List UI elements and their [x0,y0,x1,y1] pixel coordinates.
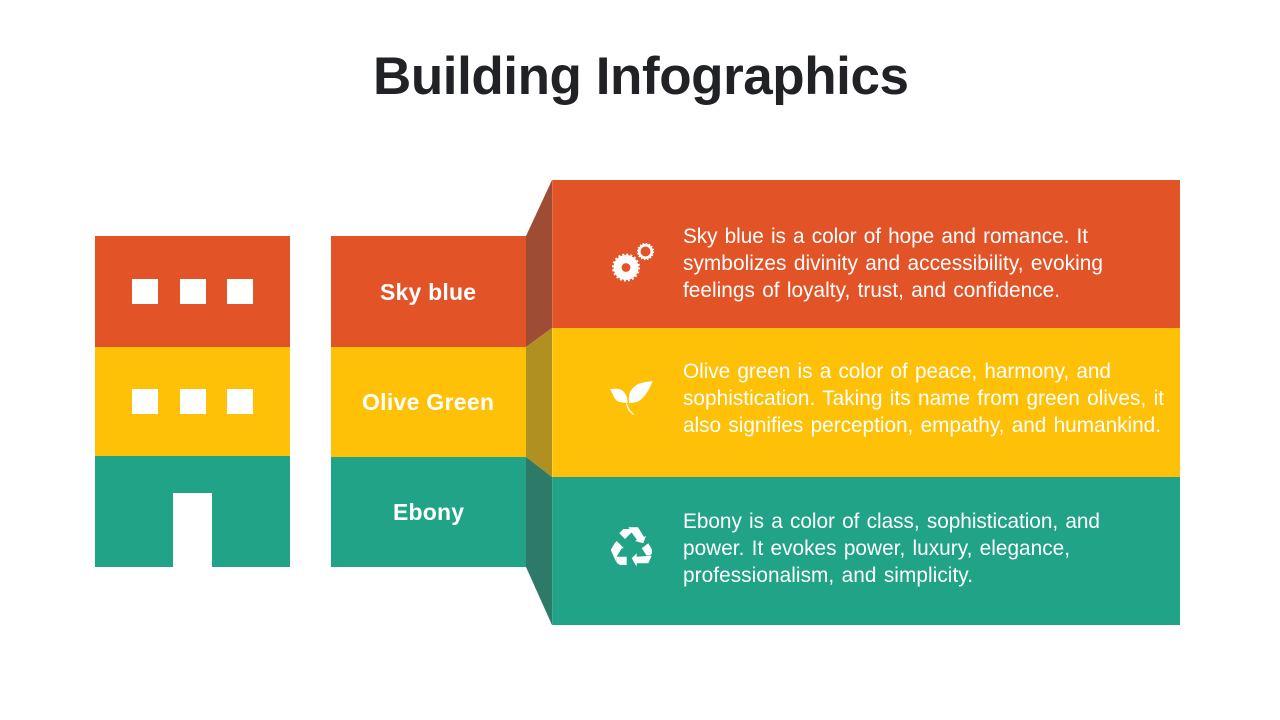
description text [683,360,1164,437]
label: Ebony: Ebony [393,499,464,525]
building top floor [95,236,290,347]
label: Olive Green: Olive Green [362,389,494,415]
icon: recycle [611,527,652,567]
panel: Sky blue [552,180,1180,328]
description text [683,225,1103,302]
description text: power. It evokes power, luxury, elegance, [683,537,1070,560]
title: Building Infographics [373,47,909,106]
building middle floor [95,347,290,456]
icon: sprout [610,381,653,415]
description text: Olive green is a color of peace, harmony, and [683,360,1111,383]
description text: symbolizes divinity and accessibility, evoking [683,252,1103,275]
description text: professionalism, and simplicity. [683,564,973,587]
description text [683,510,1100,587]
description text: also signifies perception, empathy, and humankind. [683,414,1161,437]
description text: Ebony is a color of class, sophistication, and [683,510,1100,533]
icon: gears [613,244,654,280]
panel: Olive Green [552,328,1180,477]
building ground floor with door [95,456,290,567]
label: Olive Green [331,347,526,457]
icon: building [95,236,290,567]
connector side panels [526,180,552,625]
description text: Sky blue is a color of hope and romance. It [683,225,1088,248]
description text: sophistication. Taking its name from green olives, it [683,387,1164,410]
panel: Ebony [552,477,1180,625]
label: Sky blue: Sky blue [380,279,476,305]
label: Sky blue [331,236,526,347]
label: Ebony [331,457,526,567]
description text: feelings of loyalty, trust, and confidence. [683,279,1060,302]
